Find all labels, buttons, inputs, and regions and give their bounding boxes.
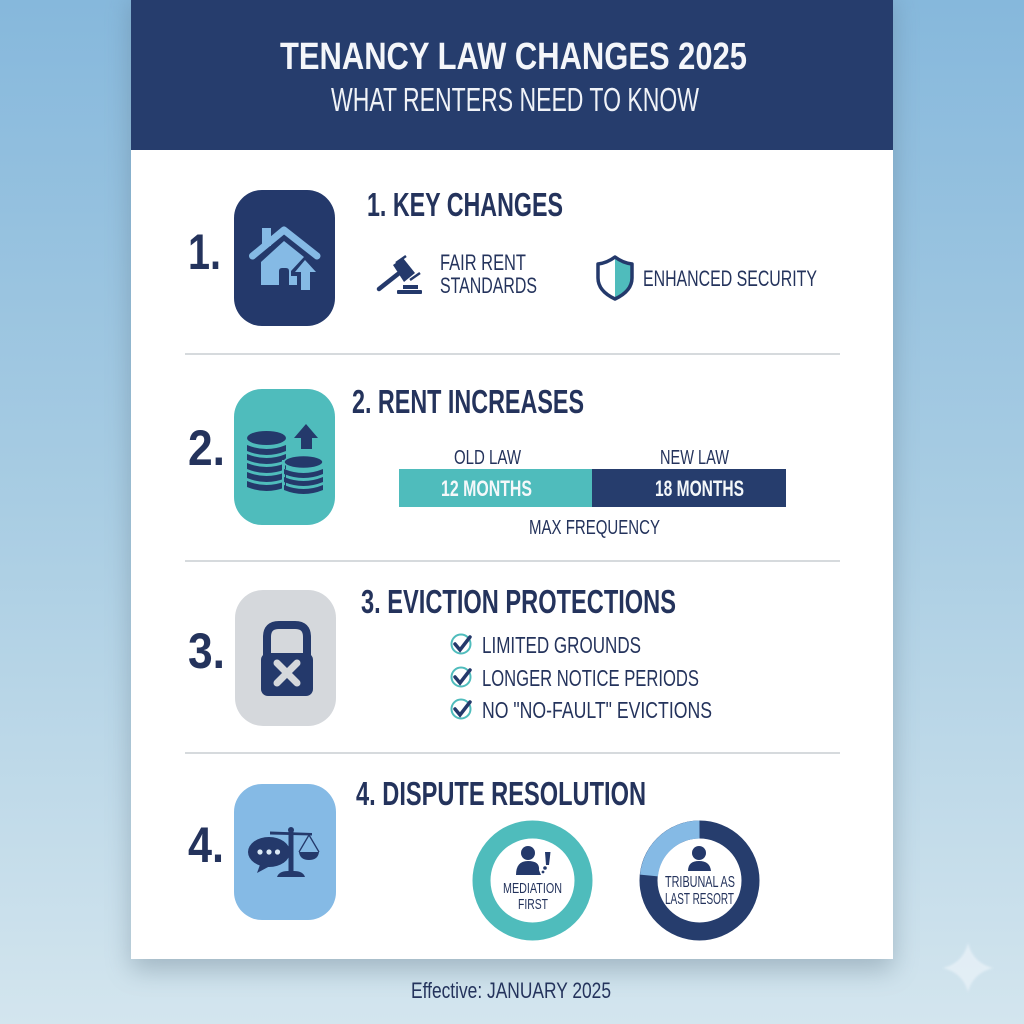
item: enhanced security	[598, 257, 817, 299]
icon: house with up arrow	[234, 190, 335, 326]
icon: padlock with x	[235, 590, 336, 726]
item: fair rent standards: FAIR RENT	[440, 250, 526, 275]
icon: speech bubble and scales	[234, 784, 336, 920]
heading: 4. DISPUTE RESOLUTION	[356, 775, 646, 812]
comparison bar: 18 MONTHS	[655, 476, 744, 501]
section 2: rent increases	[188, 383, 786, 539]
section 3: eviction protections	[188, 583, 712, 726]
icon: gavel	[379, 256, 422, 294]
checklist: NO "NO-FAULT" EVICTIONS	[482, 697, 712, 723]
checklist: LIMITED GROUNDS	[482, 632, 641, 658]
comparison bar: OLD LAW	[454, 447, 521, 469]
number 4: 4.	[188, 817, 224, 873]
icon: coins with up arrow	[234, 389, 335, 525]
main card	[131, 0, 893, 959]
number 1: 1.	[188, 224, 221, 280]
item: enhanced security: ENHANCED SECURITY	[643, 266, 817, 291]
icon: sparkle	[943, 943, 993, 992]
donut: mediation first	[482, 830, 584, 932]
number 2: 2.	[188, 420, 225, 476]
title: TENANCY LAW CHANGES 2025	[280, 36, 747, 78]
comparison bar: MAX FREQUENCY	[529, 517, 660, 539]
comparison bar: NEW LAW	[660, 447, 729, 469]
icon: shield	[598, 257, 632, 299]
heading: 2. RENT INCREASES	[352, 383, 584, 420]
comparison bar: 12 MONTHS	[441, 476, 532, 501]
donut: tribunal as last resort: TRIBUNAL AS	[665, 874, 735, 891]
item: fair rent standards: STANDARDS	[440, 273, 537, 298]
donut: mediation first: MEDIATION	[503, 880, 562, 897]
donut: tribunal as last resort: LAST RESORT	[665, 891, 734, 908]
number 3: 3.	[188, 623, 225, 679]
checklist: LONGER NOTICE PERIODS	[482, 665, 699, 691]
donut: mediation first: FIRST	[518, 896, 548, 913]
heading: 1. KEY CHANGES	[367, 186, 563, 223]
header banner	[131, 0, 893, 150]
footer: Effective: JANUARY 2025	[411, 978, 611, 1003]
subtitle: WHAT RENTERS NEED TO KNOW	[331, 81, 700, 118]
heading: 3. EVICTION PROTECTIONS	[361, 583, 676, 620]
comparison bar	[399, 447, 786, 539]
section 1: key changes	[188, 186, 817, 326]
item: fair rent standards	[379, 250, 537, 298]
icon: check	[452, 634, 470, 718]
section 4: dispute resolution	[188, 775, 750, 932]
card shadow	[131, 0, 893, 970]
donut: tribunal as last resort	[648, 830, 750, 932]
checklist	[452, 632, 712, 723]
